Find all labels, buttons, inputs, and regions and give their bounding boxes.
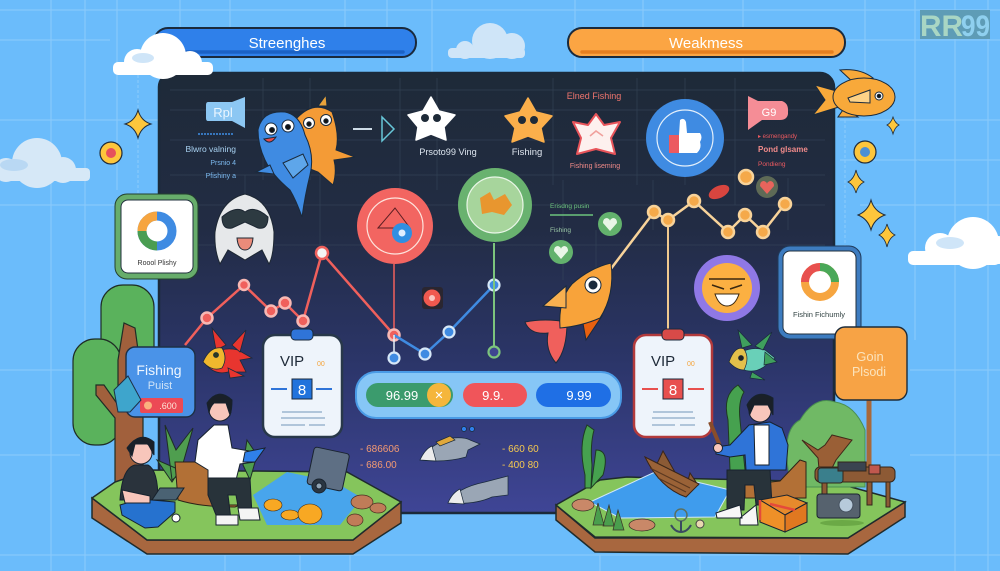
legend: green hearts: Erisdng pusin — [550, 203, 590, 210]
fishing sign: Fishing — [136, 362, 182, 378]
grey fish upper — [420, 426, 480, 461]
anchor — [671, 509, 704, 532]
teal fish — [729, 330, 777, 380]
red star — [567, 91, 621, 170]
amount pill bar — [356, 372, 621, 418]
orange star: Fishing — [512, 147, 542, 158]
weakness notes: speech bubble and text: Pond glsame — [758, 145, 808, 154]
red circle icon — [357, 188, 433, 264]
blue amount: 9.99 — [566, 388, 592, 403]
chart line: green stem — [488, 243, 500, 358]
gain sign: Goin — [856, 349, 884, 364]
thumbs up circle — [646, 99, 724, 177]
person: seated man with tablet — [195, 394, 265, 525]
seaweed behind man — [726, 385, 745, 470]
right pond — [590, 472, 730, 518]
white star — [408, 97, 477, 157]
strengths notes: speech bubble and text: Blwro valning — [185, 144, 236, 154]
weakness notes: speech bubble and text: Pondieng — [758, 161, 786, 168]
weakness notes: speech bubble and text — [748, 96, 808, 168]
VIP card left: 00 — [317, 361, 325, 368]
blue amount — [536, 383, 611, 407]
logo: RR99: RR — [920, 10, 963, 43]
orange koi — [264, 499, 322, 524]
orange star — [505, 98, 552, 158]
fishing sign: .600 — [159, 401, 177, 411]
VIP card right: VIP — [651, 353, 675, 370]
green amount — [366, 383, 453, 407]
left value list: - 686.00 — [360, 460, 397, 471]
logo: RR99: 99 — [961, 10, 990, 43]
wooden boat — [645, 451, 699, 497]
person: cross-legged boy with tablet — [120, 437, 184, 528]
VIP card right: 8 — [669, 382, 677, 399]
heading: weakness pill — [568, 28, 845, 57]
card: left donut — [115, 194, 198, 279]
left value list: - 686606 — [360, 444, 400, 455]
characters: blue and orange fish — [256, 95, 355, 217]
logo: RR99 — [920, 10, 990, 43]
left value list — [360, 444, 400, 471]
red star: Fishing liseming — [570, 163, 620, 170]
small red icon — [422, 287, 443, 309]
mask face — [215, 194, 274, 264]
gain sign — [835, 327, 907, 505]
strengths notes: speech bubble and text: Pfishiny a — [206, 173, 236, 180]
chart line: orange — [610, 170, 791, 331]
VIP card left: 8 — [298, 382, 306, 399]
right value list: - 400 80 — [502, 460, 539, 471]
white star: Prsoto99 Ving — [419, 147, 477, 157]
left pond — [253, 472, 362, 525]
weakness notes: speech bubble and text: G9 — [762, 107, 776, 119]
VIP card right — [634, 329, 712, 437]
left tree — [73, 285, 154, 484]
strengths notes: speech bubble and text: Rpl — [213, 105, 233, 120]
right bush and tree — [787, 400, 865, 487]
rocket fish — [525, 263, 612, 363]
person: seated man fishing — [710, 394, 788, 525]
legend: green hearts: Fishing — [550, 227, 571, 234]
left armchair — [175, 462, 240, 507]
goldfish — [813, 70, 895, 117]
green amount: ✕ — [434, 390, 444, 402]
chart line: blue — [388, 280, 500, 364]
cloud: top middle — [448, 23, 525, 59]
heading: strengths pill — [154, 28, 416, 57]
right armchair — [745, 460, 806, 498]
gift box — [760, 495, 807, 532]
rocks — [347, 495, 386, 526]
VIP card left: VIP — [280, 353, 304, 370]
arrow — [353, 117, 394, 141]
chart line: red — [185, 247, 400, 345]
cloud: left — [0, 138, 90, 188]
red fish — [203, 328, 252, 378]
main dark panel — [159, 73, 834, 513]
strengths notes: speech bubble and text: Prsnio 4 — [210, 160, 236, 167]
cloud: top left — [113, 33, 213, 79]
cloud: right — [908, 217, 1000, 269]
heading: weakness pill: Weakmess — [669, 35, 743, 52]
left island — [92, 447, 401, 554]
green amount: 96.99 — [386, 388, 418, 403]
VIP card left — [263, 329, 342, 437]
legend: green hearts — [549, 203, 622, 264]
weakness notes: speech bubble and text: ▸ esmengandy — [758, 134, 797, 140]
VIP card right: 00 — [687, 361, 695, 368]
camera box — [307, 447, 350, 493]
left plant — [157, 425, 257, 482]
right value list: - 660 60 — [502, 444, 539, 455]
emoji circle — [694, 255, 760, 321]
fishing sign — [114, 347, 195, 417]
camera — [817, 494, 860, 518]
heading: strengths pill: Streenghes — [249, 35, 325, 52]
right value list — [502, 444, 539, 471]
strengths notes: speech bubble and text — [185, 97, 245, 180]
green circle icon — [458, 168, 532, 242]
gain sign: Plsodi — [852, 365, 886, 379]
card: right donut: Fishin Fichumly — [793, 310, 845, 319]
right island — [556, 472, 905, 554]
card: right donut — [778, 246, 861, 339]
fishing sign: Puist — [148, 380, 172, 392]
decorations: sparkles and gears left — [100, 110, 151, 164]
red star: Elned Fishing — [567, 91, 621, 101]
rocks and reeds — [572, 499, 655, 531]
card: left donut: Roool Plishy — [138, 260, 177, 267]
grey fish lower — [448, 476, 508, 504]
decorations: sparkles and gears right — [848, 117, 899, 247]
red amount: 9.9. — [482, 388, 504, 403]
small red and heart icons — [706, 176, 778, 202]
wood table — [815, 462, 895, 508]
red amount — [463, 383, 527, 407]
seaweed left of right island — [582, 425, 605, 488]
